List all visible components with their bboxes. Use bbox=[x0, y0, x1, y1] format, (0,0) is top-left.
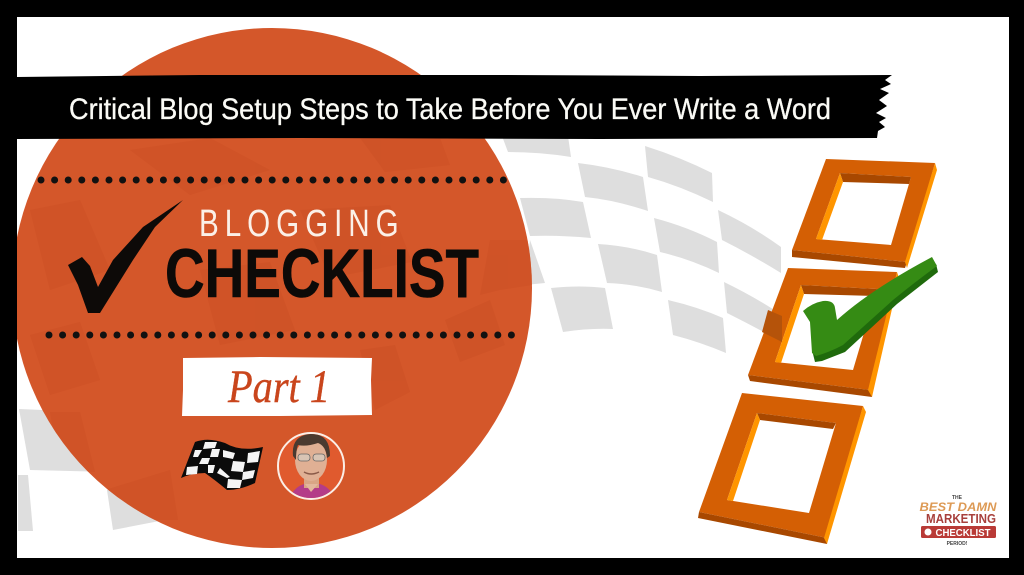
bottom dotted divider bbox=[49, 332, 513, 338]
top dotted divider bbox=[41, 176, 504, 184]
brand logo: THE bbox=[952, 495, 963, 501]
part label: Part 1 bbox=[227, 361, 330, 413]
subtle checker pattern inside circle bbox=[52, 240, 532, 520]
icon: checkered flag bbox=[181, 440, 263, 490]
heading: checklist: CHECKLIST bbox=[165, 235, 479, 312]
checkbox 1 bbox=[792, 159, 937, 268]
part label bbox=[182, 357, 372, 416]
green check mark bbox=[803, 257, 938, 362]
brand logo bbox=[920, 495, 997, 547]
black torn banner bbox=[17, 75, 892, 139]
brand logo: MARKETING bbox=[926, 512, 996, 526]
brand logo: PERIOD! bbox=[947, 541, 968, 547]
grey checkered flag backdrop bbox=[18, 136, 782, 531]
brand logo: BEST DAMN bbox=[920, 500, 997, 514]
checkbox 2 bbox=[748, 268, 899, 397]
author avatar bbox=[278, 433, 344, 500]
banner title: Critical Blog Setup Steps to Take Before You Ever Write a Word bbox=[69, 93, 831, 126]
orange circle badge bbox=[12, 28, 532, 548]
checkbox 3 bbox=[698, 393, 866, 544]
brand logo: CHECKLIST bbox=[936, 527, 991, 539]
heading: blogging: BLOGGING bbox=[199, 203, 399, 245]
large black check mark bbox=[68, 200, 183, 313]
